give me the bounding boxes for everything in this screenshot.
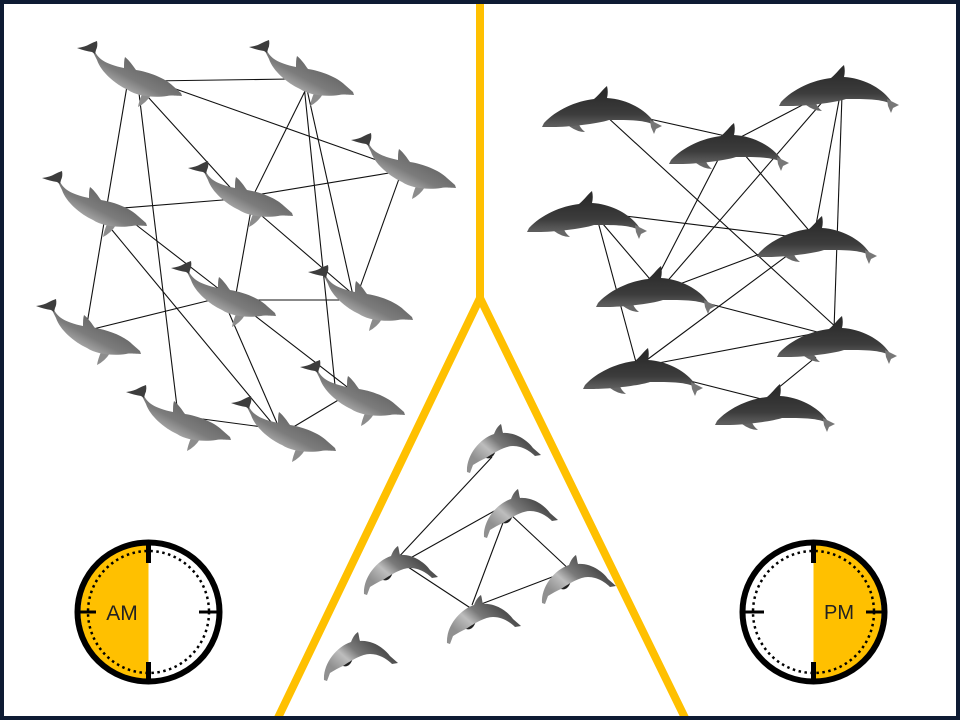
dolphin C1 <box>364 546 438 595</box>
dolphin L6 <box>171 261 276 327</box>
label AM: AM <box>106 602 138 625</box>
left network links <box>85 79 400 432</box>
dolphin L5 <box>188 161 293 227</box>
dolphin C6 <box>324 632 398 681</box>
dolphin R2 <box>669 123 789 171</box>
dolphin C2 <box>467 424 541 473</box>
dolphin L2 <box>249 40 354 106</box>
dolphin C5 <box>447 595 521 644</box>
dolphin R9 <box>715 384 835 432</box>
label PM: PM <box>824 602 854 624</box>
dolphin L10 <box>231 396 336 462</box>
dolphin L11 <box>300 360 405 426</box>
panel: left network (AM dolphins) <box>36 40 456 462</box>
panel: centre network (leaping dolphins) <box>324 424 616 681</box>
dolphin R8 <box>583 348 703 396</box>
dolphin R1 <box>542 86 662 134</box>
dolphin L7 <box>308 265 413 331</box>
dolphin R7 <box>777 316 897 364</box>
dolphin L4 <box>42 171 147 237</box>
dolphin C3 <box>484 489 558 538</box>
panel: right network (PM dolphins) <box>527 65 899 432</box>
dolphin L1 <box>77 41 182 107</box>
dolphin R3 <box>779 65 899 113</box>
dolphin R6 <box>596 266 716 314</box>
clock: PM <box>741 541 886 683</box>
dolphin R4 <box>527 191 647 239</box>
dolphin R5 <box>757 216 877 264</box>
dolphin C4 <box>542 555 616 604</box>
dolphin L9 <box>126 385 231 451</box>
dolphin L8 <box>36 299 141 365</box>
right network links <box>597 95 842 400</box>
clock: AM <box>76 541 221 683</box>
centre network links <box>395 457 572 611</box>
gold dividers <box>275 4 688 720</box>
dolphin L3 <box>351 133 456 199</box>
